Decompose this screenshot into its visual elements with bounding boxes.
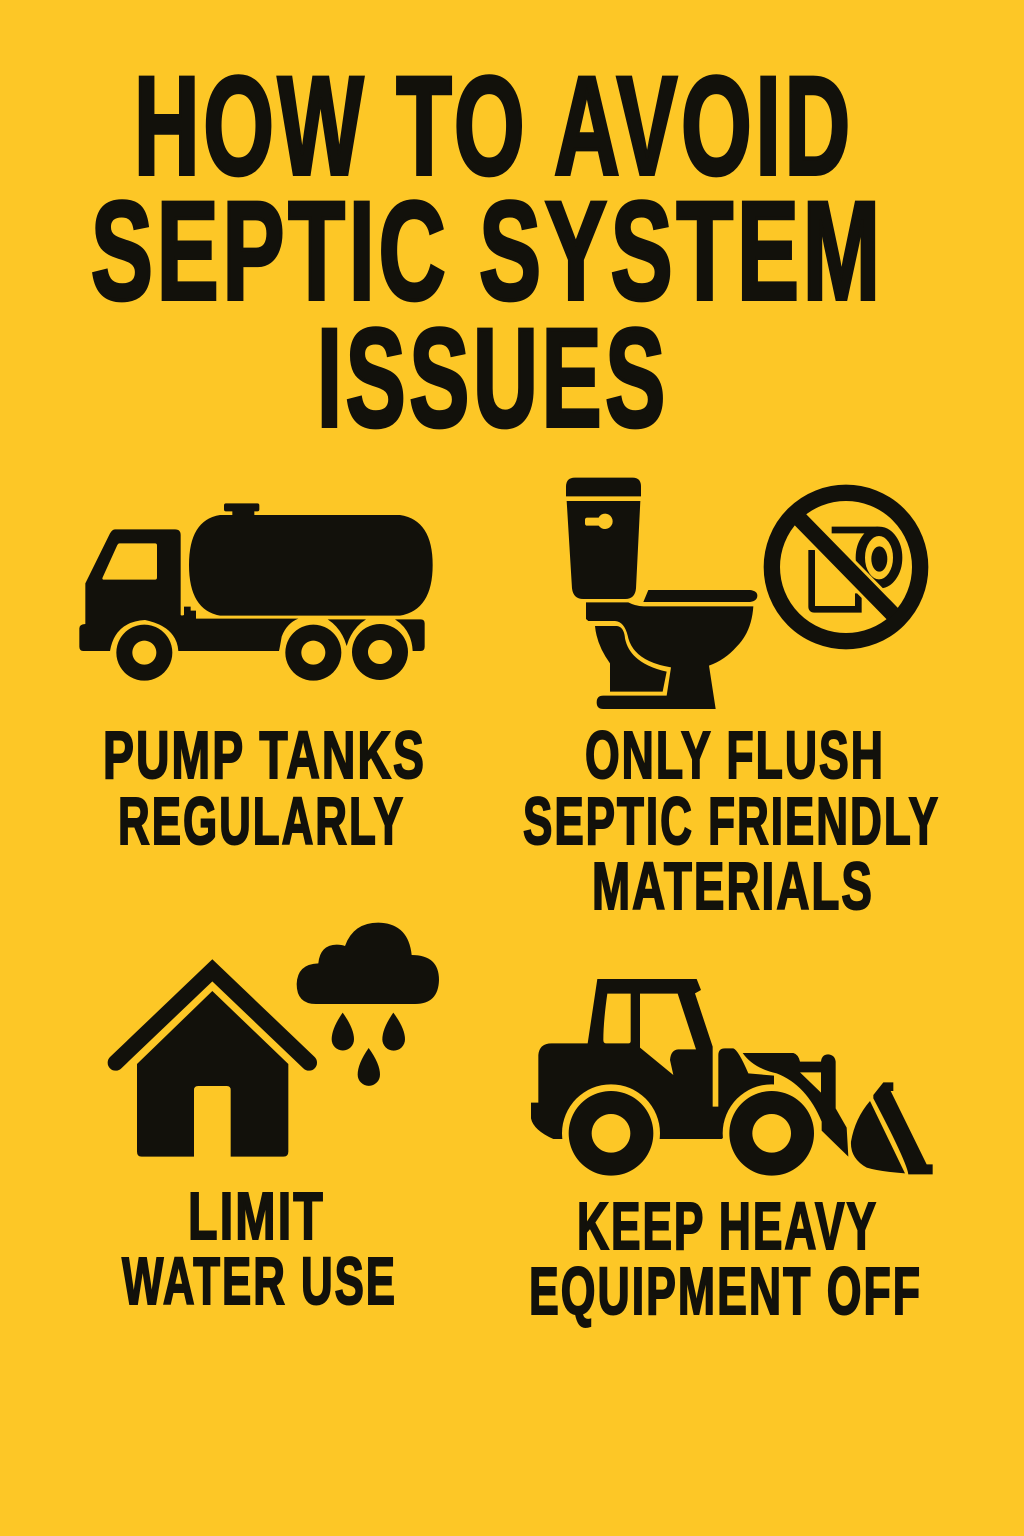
icon: rain cloud xyxy=(297,923,439,1086)
label: pump tanks regularly: REGULARLY xyxy=(118,784,405,859)
label: limit water use xyxy=(122,1179,397,1319)
panel: only flush septic friendly materials xyxy=(523,478,940,924)
label: only flush septic friendly materials: ONLY FLUSH xyxy=(585,718,885,793)
label: keep heavy equipment off xyxy=(529,1189,922,1329)
panel: keep heavy equipment off xyxy=(529,979,933,1329)
title: ISSUES xyxy=(317,299,669,456)
label: only flush septic friendly materials: MATERIALS xyxy=(592,849,874,924)
label: pump tanks regularly xyxy=(103,718,426,859)
label: keep heavy equipment off: KEEP HEAVY xyxy=(577,1189,878,1264)
panel: pump tanks xyxy=(79,503,433,859)
panel: limit water use xyxy=(116,923,439,1319)
label: limit water use: LIMIT xyxy=(188,1179,325,1254)
icon: wheel loader xyxy=(531,979,933,1182)
icon: house with rain cloud xyxy=(116,923,439,1157)
label: limit water use: WATER USE xyxy=(122,1244,397,1319)
icon: toilet xyxy=(566,478,757,709)
icon: house xyxy=(116,970,309,1157)
icon: septic tanker truck xyxy=(79,503,433,681)
title xyxy=(91,47,884,456)
icon: toilet with no toilet paper sign xyxy=(566,478,920,709)
label: pump tanks regularly: PUMP TANKS xyxy=(103,718,426,793)
icon: no toilet paper sign xyxy=(772,493,920,641)
label: only flush septic friendly materials xyxy=(523,718,940,924)
